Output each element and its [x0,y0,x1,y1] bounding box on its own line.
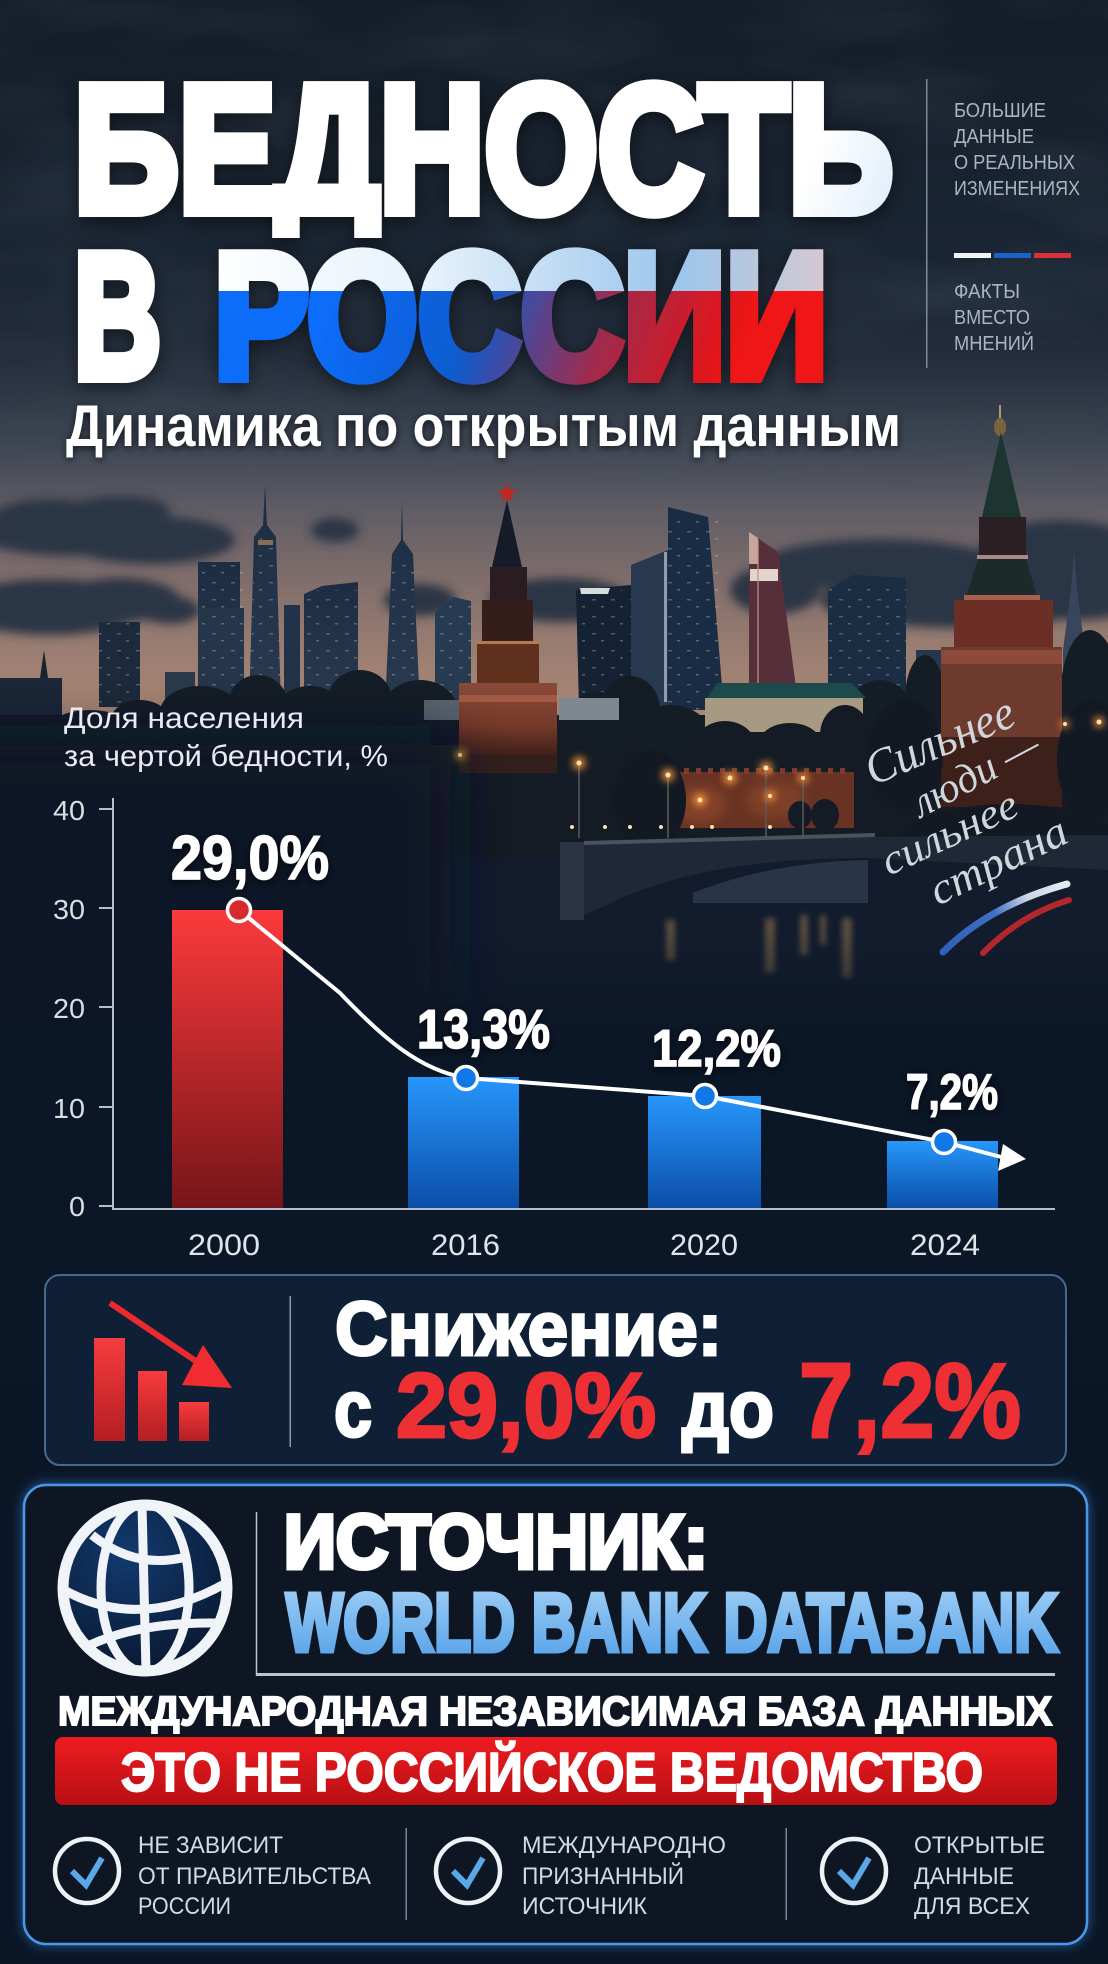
benefit 3: ОТКРЫТЫЕ [914,1832,1045,1859]
year labels: 2020 [670,1229,738,1262]
year labels: 2024 [910,1229,980,1262]
panel headline: до [682,1364,774,1453]
panel headline: Снижение: [335,1287,722,1372]
Kremlin wall [679,772,854,828]
y axis labels: 20 [53,993,85,1024]
source heading: ИСТОЧНИК: [284,1500,708,1585]
axes [99,798,1055,1209]
dusk clouds [0,496,1108,635]
handwritten slogan: люди — [902,721,1048,828]
database description: МЕЖДУНАРОДНАЯ НЕЗАВИСИМАЯ БАЗА ДАННЫХ [58,1688,1052,1734]
skyline: Moscow City towers [0,485,1085,748]
value labels: 13,3% [417,998,550,1060]
benefit 1: РОССИИ [138,1893,231,1920]
value labels [171,824,998,1120]
chart title: за чертой бедности, % [64,740,388,773]
subtitle: Динамика по открытым данным [66,394,901,459]
y axis labels: 10 [53,1093,85,1124]
year labels: 2016 [431,1229,500,1262]
value labels: 29,0% [171,824,329,893]
title: Бедность в России [72,79,896,394]
benefit 1: НЕ ЗАВИСИТ [138,1832,283,1859]
Kremlin tower, right [941,405,1062,807]
dark foreground trees by tower [614,700,1108,880]
year labels: 2000 [188,1229,260,1262]
side note panel: МНЕНИЙ [954,331,1034,355]
river and bridge [0,835,1108,1050]
side note panel: ИЗМЕНЕНИЯХ [954,178,1080,200]
side note panel: ВМЕСТО [954,307,1030,329]
trees and lower city [0,630,1108,865]
panel: source [24,1485,1087,1944]
side note panel: БОЛЬШИЕ [954,100,1046,122]
title line 1: БЕДНОСТЬ [74,49,893,250]
panel headline: 7,2% [799,1342,1021,1460]
panel headline: 29,0% [396,1355,656,1457]
background: sky and night scene [0,0,1108,982]
handwritten slogan: страна [921,806,1075,915]
y axis labels [53,795,85,1222]
chart title [64,702,388,773]
palace buildings [424,700,459,720]
flag stripes [954,253,1071,258]
benefit 1: ОТ ПРАВИТЕЛЬСТВА [138,1863,371,1890]
street lamps [455,717,1104,838]
side note panel [926,79,1080,368]
source heading frame [256,1512,1055,1675]
panel: decline summary [45,1275,1066,1465]
side note panel: О РЕАЛЬНЫХ [954,152,1075,174]
red banner: ЭТО НЕ РОССИЙСКОЕ ВЕДОМСТВО [121,1740,983,1803]
benefit 3: ДЛЯ ВСЕХ [914,1893,1030,1920]
value labels: 12,2% [652,1020,781,1078]
handwritten slogan [857,686,1075,953]
value labels: 7,2% [906,1064,998,1120]
side note panel: ДАННЫЕ [954,126,1034,148]
side note panel: ФАКТЫ [954,281,1020,303]
handwritten slogan: сильнее [874,782,1026,885]
handwritten slogan: Сильнее [857,686,1023,796]
chart title: Доля населения [64,702,304,735]
Kremlin tower, centre [459,483,557,773]
bars [172,910,283,1208]
y axis labels: 30 [53,894,85,925]
trend line with arrow [228,898,1026,1171]
panel headline [334,1287,1021,1460]
benefit 2 [436,1832,726,1920]
y axis labels: 40 [53,795,85,826]
dark fade behind chart [0,745,450,1185]
icon: falling bars with arrow [94,1303,232,1441]
year labels [188,1229,980,1262]
benefit 1 [55,1832,371,1920]
panel headline: с [334,1364,372,1453]
y axis labels: 0 [69,1191,85,1222]
title line 2: России in flag colours: РОССИИ [214,217,828,415]
icon: globe [63,1504,227,1672]
title line 2: В: В [74,217,161,415]
benefit 2: ПРИЗНАННЫЙ [522,1862,684,1890]
benefit 3: ДАННЫЕ [914,1863,1014,1890]
benefit 2: МЕЖДУНАРОДНО [522,1832,726,1859]
benefit 2: ИСТОЧНИК [522,1893,647,1920]
benefit 3 [822,1832,1045,1920]
flag brush strokes [943,884,1067,952]
bar chart: poverty share 2000-2024 [53,795,1055,1262]
